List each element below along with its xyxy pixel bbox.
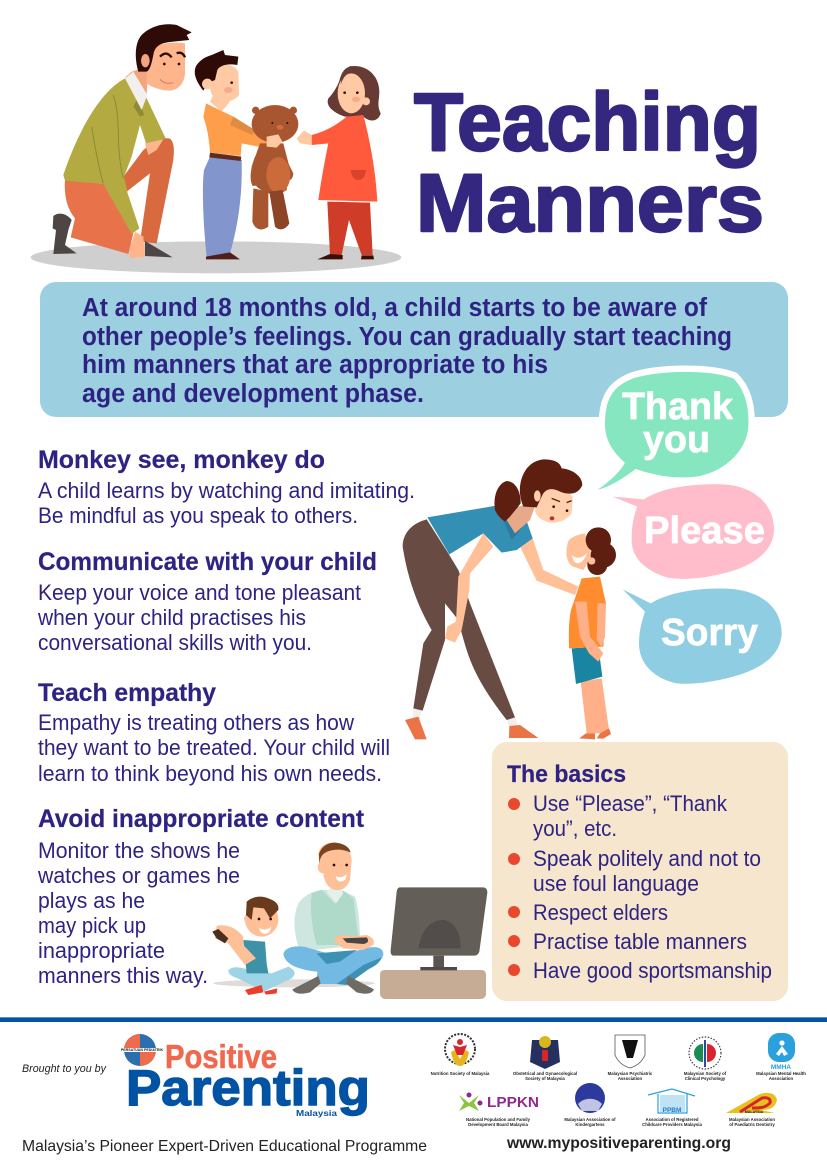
- logo: Positive Parenting Malaysia: [121, 1034, 370, 1118]
- brought to you by: Brought to you by: [22, 1063, 107, 1075]
- logo: Malaysian Association of Paediatric Dentistry: [726, 1093, 777, 1127]
- text block: monkey see, monkey do: A child learns by watching and imitating.: [38, 478, 415, 503]
- illustration: father and children with teddy bear: [31, 24, 401, 273]
- heading: the basics: The basics: [507, 761, 626, 788]
- panel: introduction: [40, 282, 788, 417]
- text block: avoid inappropriate content: plays as he: [38, 888, 145, 913]
- logo: Association of Registered Childcare Providers Malaysia: PPBM: [663, 1107, 681, 1114]
- logo: LPPKN: LPPKN: [487, 1094, 539, 1111]
- text block: teach empathy: Empathy is treating others as how: [38, 710, 354, 735]
- speech bubble: Thank you: Thank: [622, 386, 734, 428]
- text block: communicate with your child: conversational skills with you.: [38, 630, 312, 655]
- text block: communicate with your child: when your child practises his: [37, 605, 306, 630]
- panel: introduction: At around 18 months old, a child starts to be aware of: [82, 294, 707, 322]
- partner logos: [431, 1033, 806, 1127]
- logo: Association of Registered Childcare Providers Malaysia: [642, 1089, 702, 1127]
- text block: monkey see, monkey do: Be mindful as you speak to others.: [38, 503, 358, 528]
- panel: introduction: him manners that are appropriate to his: [82, 351, 548, 379]
- logo: Malaysian Society of Clinical Psychology: Malaysian Society of: [684, 1071, 727, 1076]
- text block: avoid inappropriate content: inappropriate: [38, 938, 165, 963]
- logo: Nutrition Society of Malaysia: Nutrition Society of Malaysia: [431, 1071, 490, 1076]
- logo: Malaysian Association of Paediatric Dentistry: of Paediatric Dentistry: [729, 1122, 775, 1127]
- list: basics bullets: Use “Please”, “Thank: [533, 791, 728, 816]
- tagline: Malaysia’s Pioneer Expert-Driven Educational Programme: [22, 1138, 427, 1155]
- logo: LPPKN: [459, 1092, 539, 1127]
- logo: Positive Parenting Malaysia: Positive: [165, 1038, 277, 1075]
- text block: teach empathy: [38, 679, 390, 786]
- list: basics bullets: Speak politely and not to: [533, 846, 761, 871]
- list: basics bullets: [508, 791, 772, 983]
- logo: Obstetrical and Gynaecological Society of Malaysia: Society of Malaysia: [525, 1076, 565, 1081]
- logo: Positive Parenting Malaysia: Parenting: [126, 1060, 370, 1116]
- text block: monkey see, monkey do: Monkey see, monkey do: [38, 446, 325, 474]
- speech bubble: Thank you: you: [643, 419, 710, 461]
- text block: avoid inappropriate content: Monitor the shows he: [38, 838, 240, 863]
- footer divider: [0, 1017, 827, 1022]
- icon: paediatric crest: [121, 1034, 163, 1066]
- website url: www.mypositiveparenting.org: [506, 1135, 731, 1152]
- panel: introduction: other people’s feelings. You can gradually start teaching: [82, 323, 732, 351]
- text block: avoid inappropriate content: watches or games he: [37, 863, 240, 888]
- speech bubble: Please: Please: [644, 510, 765, 552]
- panel: the basics: [492, 742, 788, 1001]
- logo: Malaysian Society of Clinical Psychology: Clinical Psychology: [685, 1076, 726, 1081]
- text block: teach empathy: they want to be treated. Your child will: [38, 735, 390, 760]
- text block: avoid inappropriate content: Avoid inappropriate content: [38, 805, 365, 833]
- text block: communicate with your child: [37, 548, 377, 655]
- logo: Malaysian Mental Health Association: Association: [769, 1076, 794, 1081]
- logo: Malaysian Association of Paediatric Dentistry: MALAYSIA: [745, 1110, 764, 1114]
- speech bubble: Please: [613, 484, 774, 579]
- text block: avoid inappropriate content: manners this way.: [38, 963, 208, 988]
- list: basics bullets: use foul language: [533, 871, 699, 896]
- list: basics bullets: Practise table manners: [533, 929, 747, 954]
- text block: communicate with your child: Keep your voice and tone pleasant: [38, 580, 361, 605]
- logo: Association of Registered Childcare Providers Malaysia: Childcare Providers Malaysia: [642, 1122, 702, 1127]
- logo: Malaysian Psychiatric Association: [608, 1035, 653, 1081]
- logo: Positive Parenting Malaysia: Malaysia: [296, 1109, 338, 1118]
- logo: Malaysian Mental Health Association: Malaysian Mental Health: [756, 1071, 806, 1076]
- logo: Malaysian Association of Kindergartens: Kindergartens: [575, 1122, 605, 1127]
- speech bubble: Sorry: [623, 588, 782, 684]
- text block: teach empathy: Teach empathy: [38, 679, 216, 707]
- list: basics bullets: you”, etc.: [533, 816, 617, 841]
- logo: Malaysian Mental Health Association: MMHA: [771, 1064, 791, 1071]
- title: [414, 77, 764, 249]
- text block: monkey see, monkey do: [38, 446, 415, 528]
- text block: avoid inappropriate content: may pick up: [38, 913, 146, 938]
- title: Teaching: [414, 77, 761, 168]
- logo: Malaysian Psychiatric Association: Association: [618, 1076, 643, 1081]
- illustration: mother bending to son: [403, 459, 616, 739]
- speech bubble: Sorry: Sorry: [661, 612, 758, 654]
- title: Manners: [416, 158, 764, 249]
- text block: teach empathy: learn to think beyond his own needs.: [38, 761, 382, 786]
- list: basics bullets: Have good sportsmanship: [533, 958, 772, 983]
- logo: LPPKN: Development Board Malaysia: [468, 1122, 528, 1127]
- logo: Malaysian Mental Health Association: [756, 1033, 806, 1081]
- logo: Malaysian Association of Paediatric Dentistry: Malaysian Association: [729, 1117, 775, 1122]
- logo: Malaysian Association of Kindergartens: [564, 1083, 616, 1127]
- text block: avoid inappropriate content: [37, 805, 365, 988]
- logo: LPPKN: National Population and Family: [466, 1117, 531, 1122]
- logo: Obstetrical and Gynaecological Society of Malaysia: [513, 1036, 577, 1081]
- logo: Malaysian Society of Clinical Psychology: [684, 1037, 727, 1081]
- logo: Obstetrical and Gynaecological Society of Malaysia: Obstetrical and Gynaecological: [513, 1071, 577, 1076]
- list: basics bullets: Respect elders: [533, 900, 668, 925]
- illustration: father and son playing video games: [212, 843, 487, 999]
- panel: introduction: age and development phase.: [82, 380, 424, 408]
- logo: Malaysian Psychiatric Association: Malaysian Psychiatric: [608, 1071, 653, 1076]
- text block: communicate with your child: Communicate with your child: [38, 548, 377, 576]
- speech bubble: Thank you: [597, 372, 748, 490]
- logo: Malaysian Association of Kindergartens: Malaysian Association of: [564, 1117, 616, 1122]
- logo: Association of Registered Childcare Providers Malaysia: Association of Registered: [645, 1117, 699, 1122]
- icon: paediatric crest: PERSATUAN PEDIATRIK: [121, 1048, 163, 1052]
- logo: Nutrition Society of Malaysia: [431, 1034, 490, 1076]
